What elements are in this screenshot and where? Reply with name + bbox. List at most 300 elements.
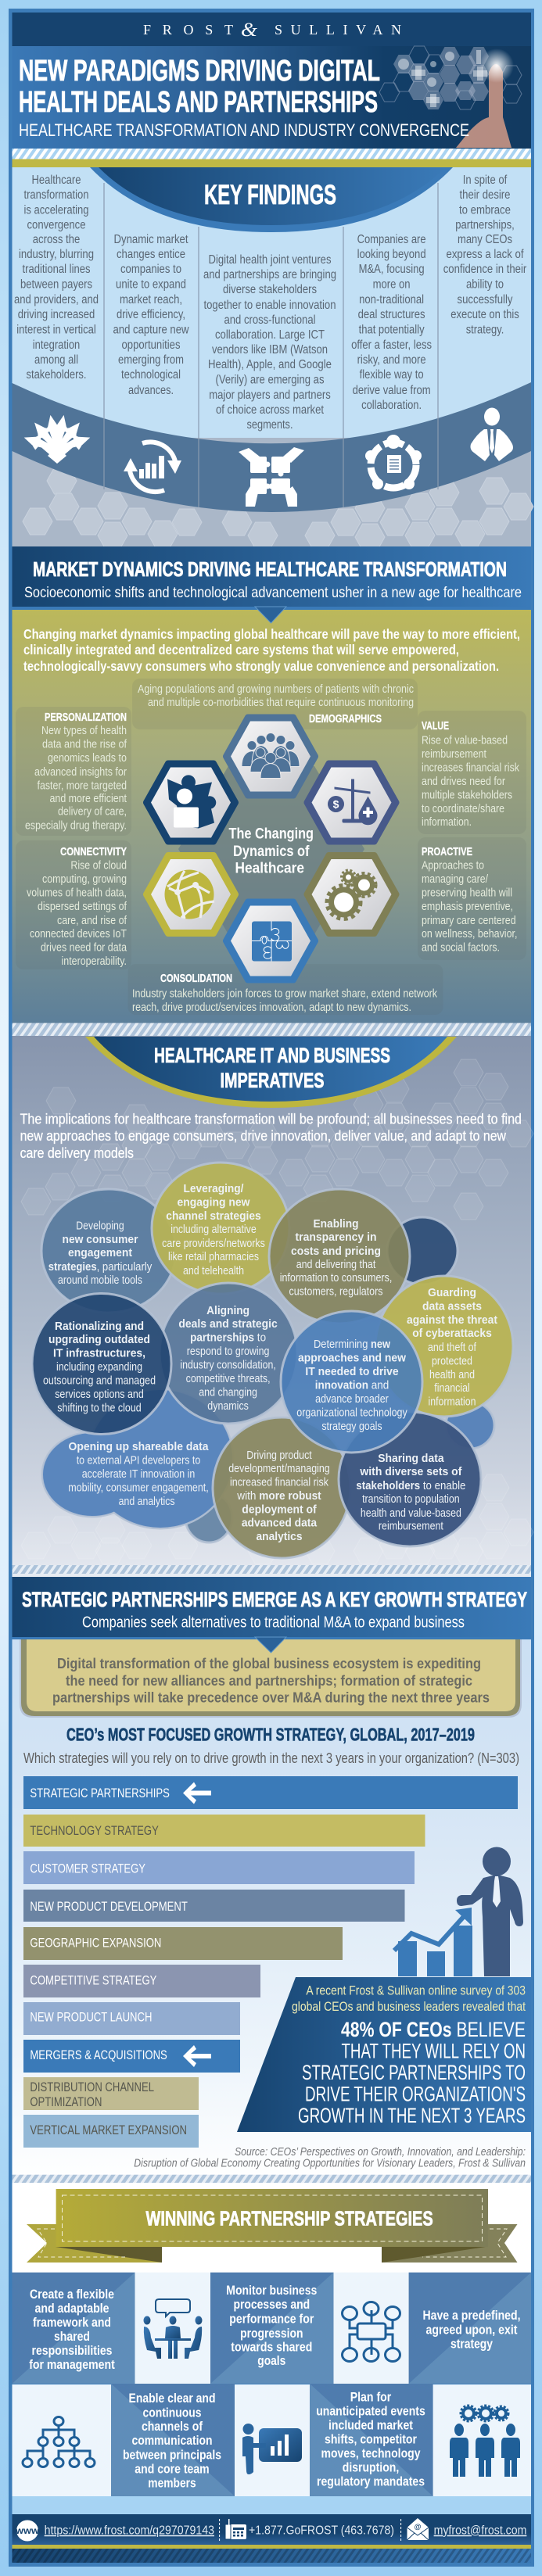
bubble: data assets: information: [429, 1395, 476, 1409]
text: finding 1: traditional lines: [22, 263, 91, 276]
box: proactive: managing care/: [422, 872, 489, 886]
strategy 2: performance for: [229, 2313, 314, 2327]
text: finding 1: [14, 174, 99, 382]
strategy 1: for management: [29, 2358, 115, 2372]
strategy 1: and adaptable: [34, 2302, 109, 2316]
box: demographics: DEMOGRAPHICS: [309, 712, 382, 726]
text: finding 1: is accelerating: [23, 203, 89, 217]
icon: businessman: [471, 408, 513, 461]
intro text: care delivery models: [20, 1145, 134, 1161]
footer: [13, 2514, 531, 2563]
callout: tan box: partnerships will take precedence over M&A during the next three years: [52, 1689, 490, 1706]
heading: strategic partnerships: Companies seek alternatives to traditional M&A to expand business: [82, 1614, 465, 1632]
icon: email envelope: @: [415, 2523, 422, 2531]
bubble: transparency: Enabling: [313, 1217, 358, 1231]
source note: [134, 2146, 526, 2170]
strategy 1: framework and: [33, 2316, 111, 2330]
bar: competitive strategy: [23, 1965, 260, 1997]
ribbon heading: WINNING PARTNERSHIP STRATEGIES: [145, 2207, 433, 2230]
bubble: data analytics: development/managing: [228, 1462, 330, 1475]
bubble: data analytics: advanced data: [242, 1517, 318, 1530]
text: finding 5: strategy.: [466, 324, 504, 337]
hexagon diagram: [146, 718, 396, 980]
bubble: new approaches and IT: advance broader: [315, 1392, 389, 1406]
title: [19, 55, 380, 119]
box: value: information.: [422, 815, 472, 829]
hexagon: proactive: [307, 855, 396, 933]
box: value: increases financial risk: [422, 761, 519, 775]
strategy 2: progression: [240, 2327, 303, 2341]
bar: technology strategy: [23, 1815, 425, 1847]
text: finding 2: technological: [121, 368, 181, 382]
strategy 3: Have a predefined,: [422, 2309, 521, 2323]
hexagon: consolidation: [226, 902, 315, 980]
bubble: consumer engagement: around mobile tools: [58, 1274, 142, 1287]
text: finding 3: and cross-functional: [224, 313, 316, 327]
text: finding 5: successfully: [457, 293, 513, 306]
center label: The Changing: [228, 826, 314, 843]
strategy 1: Create a flexible: [30, 2288, 114, 2302]
bubble: deals and partnerships: respond to growing: [187, 1345, 269, 1358]
bubble: new channel strategies: like retail pharmacies: [168, 1250, 259, 1263]
strategy 4: [111, 2384, 235, 2496]
box: consolidation: Industry stakeholders join forces to grow market share, extend network: [132, 987, 437, 1001]
text: finding 2: [113, 233, 189, 397]
bubble: new approaches and IT: Determining new: [314, 1338, 390, 1351]
bubble: sharing data: stakeholders to enable: [356, 1479, 465, 1492]
box: demographics: and multiple co-morbidities that require continuous monitoring: [148, 696, 414, 709]
bubble: new approaches and IT: IT needed to drive: [305, 1365, 399, 1378]
text: finding 5: confidence in their: [443, 263, 526, 276]
panel: market dynamics: [13, 607, 531, 1023]
box: connectivity: Rise of cloud: [70, 859, 127, 872]
box: value: [418, 711, 526, 834]
text: finding 4: collaboration.: [361, 399, 422, 412]
text: finding 4: non-traditional: [359, 293, 424, 306]
text: finding 1: integration: [33, 339, 80, 352]
bubble: new approaches and IT: approaches and new: [298, 1352, 406, 1365]
text: finding 1: Healthcare: [31, 174, 81, 187]
bar: distribution channel optimization: [23, 2077, 199, 2110]
panel: growth strategy survey: [13, 1637, 531, 2184]
callout: 48% of CEOs: 48% OF CEOs BELIEVE: [341, 2018, 526, 2041]
box: connectivity: connected devices IoT: [30, 927, 127, 940]
strategy 5: Plan for: [350, 2391, 392, 2405]
text: finding 1: driving increased: [18, 308, 95, 321]
title: HEALTH DEALS AND PARTNERSHIPS: [19, 86, 378, 119]
bubble: sharing data: health and value-based: [361, 1507, 461, 1520]
bubble: consumer engagement: Developing: [76, 1220, 124, 1233]
text: finding 1: interest in vertical: [16, 324, 96, 337]
bar: new product launch: [23, 2002, 240, 2035]
bubble: sharing data: with diverse sets of: [359, 1465, 462, 1478]
bubble: new approaches and IT: strategy goals: [321, 1420, 382, 1433]
bubble: shareable data: Opening up shareable data: [69, 1440, 209, 1453]
text: finding 4: [351, 233, 432, 412]
callout: tan box: Digital transformation of the global business ecosystem is expediting: [57, 1655, 481, 1671]
text: finding 2: unite to expand: [116, 278, 186, 292]
text: finding 4: deal structures: [358, 308, 425, 321]
bubble: shareable data: and analytics: [119, 1495, 175, 1508]
bubble: data assets: protected: [432, 1355, 472, 1368]
bubble: consumer engagement: engagement: [68, 1246, 132, 1259]
logo bar: SULLIVAN: [275, 22, 401, 38]
bubble: data analytics: deployment of: [242, 1503, 318, 1517]
text: finding 2: emerging from: [118, 353, 184, 367]
bubble: IT infrastructures: [43, 1320, 156, 1415]
strategy 5: moves, technology: [321, 2447, 421, 2461]
bubble: transparency: transparency in: [296, 1231, 377, 1244]
text: finding 1: between payers: [20, 278, 92, 292]
icon: meeting: [144, 2299, 202, 2359]
logo bar: [13, 13, 531, 46]
row 2 background: [13, 2384, 531, 2496]
bubble: deals and partnerships: competitive threats,: [186, 1372, 271, 1385]
text: finding 3: and partnerships are bringing: [203, 268, 336, 281]
heading arc: key findings: [90, 167, 453, 232]
text: finding 5: In spite of: [463, 174, 508, 187]
text: finding 3: [203, 253, 336, 432]
icon: growth cycle: [124, 442, 181, 492]
box: personalization: and more efficient: [50, 792, 127, 805]
text: finding 1: among all: [34, 353, 78, 367]
callout: tan box: the need for new alliances and partnerships; formation of strategic: [66, 1672, 472, 1689]
row 1 background: [13, 2273, 531, 2384]
strategy 2: goals: [257, 2354, 285, 2368]
strategy 4: between principals: [123, 2449, 221, 2463]
column dividers: [104, 183, 438, 507]
box: consolidation: reach, drive product/services innovation, adapt to new dynamics.: [132, 1001, 411, 1014]
text: finding 5: [443, 174, 526, 337]
text: finding 1: across the: [33, 233, 80, 246]
text: finding 3: Health), Apple, and Google: [208, 358, 332, 371]
text: finding 4: derive value from: [353, 384, 431, 397]
text: finding 5: execute on this: [450, 308, 519, 321]
bubble: new channel strategies: [162, 1182, 265, 1277]
bubble: data assets: and theft of: [428, 1341, 477, 1354]
intro text: [20, 1112, 522, 1161]
text: finding 5: to embrace: [459, 203, 511, 217]
text: finding 1: and providers, and: [14, 293, 99, 306]
strategy 1: [13, 2273, 135, 2384]
strategy 5: disruption,: [343, 2461, 399, 2475]
bubble: sharing data: [356, 1452, 465, 1533]
bubble: IT infrastructures: services options and: [55, 1388, 144, 1401]
text: finding 1: stakeholders.: [27, 368, 86, 382]
logo bar: FROST: [143, 22, 233, 38]
strategy 5: [310, 2384, 433, 2496]
strategy 4: and core team: [135, 2463, 210, 2477]
icon: email envelope: [407, 2518, 429, 2540]
bubble: sharing data: transition to population: [362, 1492, 460, 1506]
bubble: sharing data: reimbursement: [379, 1520, 444, 1533]
text: finding 5: ability to: [466, 278, 504, 292]
text: finding 1: transformation: [23, 188, 89, 202]
strategy 3: [409, 2273, 531, 2384]
text: finding 4: that potentially: [359, 324, 425, 337]
bubble: sharing data: Sharing data: [378, 1452, 444, 1465]
bubble: deals and partnerships: and changing: [199, 1386, 257, 1399]
bubble: deals and partnerships: Aligning: [206, 1304, 249, 1317]
text: finding 3: (Verily) are emerging as: [216, 374, 325, 387]
bubble: new channel strategies: care providers/networks: [162, 1237, 265, 1250]
box: demographics: [132, 679, 418, 729]
bubble: data analytics: analytics: [257, 1530, 302, 1543]
bubble: new approaches and IT: organizational technology: [296, 1406, 407, 1420]
text: finding 4: Companies are: [357, 233, 426, 246]
bubble: data assets: of cyberattacks: [412, 1327, 492, 1340]
bar chart: [23, 1776, 518, 2148]
box: value: multiple stakeholders: [422, 789, 512, 802]
bubble: new channel strategies: Leveraging/: [183, 1182, 244, 1195]
box: connectivity: computing, growing: [42, 872, 127, 886]
strategy 4: communication: [131, 2434, 213, 2448]
box: proactive: PROACTIVE: [422, 845, 472, 858]
bar: geographic expansion: [23, 1927, 343, 1960]
icon: businessman with growth chart: [394, 1847, 523, 1976]
hexagon: connectivity: [146, 855, 235, 933]
bar: competitive strategy: COMPETITIVE STRATEGY: [30, 1973, 156, 1988]
strategy 1: shared: [54, 2330, 90, 2344]
strategy 3: strategy: [450, 2338, 494, 2352]
website link: https://www.frost.com/q297079143: [45, 2524, 214, 2538]
center label: Healthcare: [235, 861, 304, 877]
text: finding 4: offer a faster, less: [351, 339, 432, 352]
icon: phone: [225, 2519, 246, 2539]
phone number: +1.877.GoFROST (463.7678): [249, 2524, 394, 2538]
box: personalization: PERSONALIZATION: [45, 711, 127, 724]
box: consolidation: [128, 964, 443, 1015]
center hexagon: [178, 766, 364, 934]
bar: new product development: NEW PRODUCT DEVELOPMENT: [30, 1899, 188, 1914]
text: finding 3: major players and partners: [209, 389, 331, 402]
callout: tan box: [20, 1637, 522, 1718]
bubble: deals and partnerships: dynamics: [207, 1399, 249, 1413]
banner: [13, 46, 531, 149]
bubble chart: [32, 1163, 513, 1558]
curved band: [13, 382, 531, 512]
bubble: data analytics: Driving product: [246, 1449, 312, 1462]
box: proactive: emphasis preventive,: [422, 900, 513, 913]
box: personalization: data and the rise of: [42, 738, 127, 751]
bar: new product development: [23, 1890, 405, 1922]
bubble: deals and partnerships: deals and strategic: [178, 1317, 278, 1331]
text: finding 3: segments.: [247, 418, 293, 432]
bubble: new approaches and IT: [296, 1338, 407, 1433]
bubble: data analytics: [228, 1449, 330, 1543]
bar: customer strategy: CUSTOMER STRATEGY: [30, 1861, 145, 1876]
text: finding 3: diverse stakeholders: [223, 283, 317, 296]
bubble: IT infrastructures: outsourcing and managed: [43, 1374, 156, 1388]
strategy 4: members: [148, 2477, 196, 2491]
callout: 48% of CEOs: [237, 1977, 531, 2132]
bubble: shareable data: accelerate IT innovation in: [82, 1467, 195, 1481]
heading arc: imperatives: [85, 1037, 457, 1108]
heading: strategic partnerships: [13, 1577, 531, 1637]
text: finding 2: Dynamic market: [114, 233, 188, 246]
bubble: deals and partnerships: partnerships to: [190, 1331, 266, 1345]
bar: mergers and acquisitions: MERGERS & ACQUISITIONS: [30, 2048, 167, 2062]
heading arc: key findings: KEY FINDINGS: [204, 180, 336, 210]
bubble: new channel strategies: including alternative: [170, 1223, 257, 1236]
bubble: new channel strategies: and telehealth: [183, 1264, 244, 1277]
arrow notch: [255, 607, 286, 623]
hexagon: demographics: [226, 718, 315, 796]
text: finding 2: companies to: [120, 263, 181, 276]
bubble: new channel strategies: engaging new: [177, 1196, 250, 1209]
bar: vertical market expansion: [23, 2115, 199, 2148]
heading arc: imperatives: IMPERATIVES: [221, 1069, 324, 1092]
heading: market dynamics: [13, 546, 531, 607]
intro text: clinically integrated and decentralized care systems that will serve empowered,: [23, 642, 459, 657]
bubble: consumer engagement: strategies, particularly: [48, 1260, 153, 1274]
text: finding 3: of choice across market: [216, 403, 325, 417]
icon: converging arrows: [21, 414, 93, 464]
strategy 1: responsibilities: [31, 2344, 113, 2358]
bubble: data assets: [407, 1286, 497, 1409]
hexagon: personalization: [146, 763, 235, 841]
bubble: data assets: Guarding: [428, 1286, 476, 1299]
box: proactive: primary care centered: [422, 914, 516, 927]
strategy 5: included market: [328, 2419, 413, 2433]
box: connectivity: drives need for data: [41, 941, 127, 955]
box: personalization: advanced insights for: [34, 765, 127, 779]
strategy 5: unanticipated events: [316, 2405, 425, 2419]
arrow: mergers and acquisitions: [183, 2045, 211, 2067]
text: finding 1: industry, blurring: [19, 248, 94, 261]
strategy 2: [210, 2273, 333, 2384]
bubble: deals and partnerships: industry consolidation,: [180, 1359, 276, 1372]
bubble: new channel strategies: channel strategies: [166, 1209, 261, 1223]
text: finding 3: collaboration. Large ICT: [215, 328, 325, 342]
panel: key findings: [13, 167, 533, 550]
bubble: data assets: health and: [429, 1368, 475, 1381]
bar: technology strategy: TECHNOLOGY STRATEGY: [30, 1823, 159, 1838]
intro text: [23, 626, 520, 674]
bubble: transparency: customers, regulators: [289, 1285, 383, 1299]
text: finding 5: their desire: [460, 188, 510, 202]
bubble: IT infrastructures: shifting to the cloud: [57, 1402, 142, 1415]
bubble: transparency: [280, 1217, 392, 1299]
strategy 5: shifts, competitor: [325, 2433, 417, 2447]
bubble: IT infrastructures: upgrading outdated: [48, 1333, 150, 1346]
hexagon pattern: [23, 468, 533, 550]
bubble: IT infrastructures: IT infrastructures,: [53, 1347, 145, 1360]
ribbon heading: [27, 2189, 518, 2263]
strategy 2: towards shared: [231, 2341, 312, 2355]
bar: distribution channel optimization: OPTIMIZATION: [30, 2094, 102, 2109]
bubble: data analytics: increased financial risk: [230, 1476, 328, 1489]
text: finding 4: more on: [373, 278, 411, 292]
title: NEW PARADIGMS DRIVING DIGITAL: [19, 55, 380, 88]
bubble: deals and partnerships: [178, 1304, 278, 1413]
text: finding 2: opportunities: [122, 339, 181, 352]
bubble: transparency: information to consumers,: [280, 1271, 392, 1284]
panel: healthcare IT and business imperatives: [13, 1036, 533, 1565]
icon: www: [15, 2520, 40, 2541]
box: consolidation: CONSOLIDATION: [160, 972, 232, 985]
strategy 3: agreed upon, exit: [425, 2323, 518, 2338]
text: finding 4: flexible way to: [360, 368, 424, 382]
bar: new product launch: NEW PRODUCT LAUNCH: [30, 2010, 152, 2025]
text: finding 4: looking beyond: [357, 248, 426, 261]
bar: strategic partnerships: [23, 1776, 518, 1809]
hexagon: value: $: [333, 797, 339, 810]
strategy 2: processes and: [233, 2298, 310, 2312]
box: personalization: especially drug therapy.: [25, 819, 127, 833]
heading arc: imperatives: HEALTHCARE IT AND BUSINESS: [154, 1044, 390, 1067]
text: finding 5: partnerships,: [455, 219, 515, 231]
text: finding 2: market reach,: [120, 293, 182, 306]
bubble backgrounds: [32, 1163, 513, 1558]
bar: customer strategy: [23, 1851, 415, 1884]
text: finding 3: together to enable innovation: [203, 299, 336, 312]
box: personalization: [16, 707, 131, 836]
box: proactive: Approaches to: [422, 859, 484, 872]
text: finding 1: convergence: [27, 219, 86, 231]
strategy 4: channels of: [142, 2420, 203, 2434]
box: connectivity: care, and rise of: [57, 914, 127, 927]
text: finding 2: and capture new: [113, 324, 189, 337]
bubble: IT infrastructures: including expanding: [56, 1360, 142, 1374]
strategy 5: regulatory mandates: [317, 2475, 425, 2489]
strategy 4: Enable clear and: [128, 2391, 216, 2406]
box: proactive: and social factors.: [422, 941, 500, 955]
bubble: IT infrastructures: Rationalizing and: [55, 1320, 144, 1333]
icon: process network: [343, 2302, 400, 2361]
box: demographics: Aging populations and growing numbers of patients with chronic: [138, 683, 414, 696]
email link: myfrost@frost.com: [434, 2524, 526, 2538]
bubble: shareable data: [68, 1440, 209, 1508]
box: connectivity: [16, 840, 131, 969]
box: connectivity: volumes of health data,: [27, 887, 127, 900]
logo bar: &: [241, 20, 258, 41]
text: finding 3: vendors like IBM (Watson: [212, 343, 328, 356]
text: finding 2: changes entice: [117, 248, 185, 261]
icon: medical hexagons and finger: [379, 46, 522, 148]
bar: mergers and acquisitions: [23, 2040, 240, 2073]
bar: strategic partnerships: STRATEGIC PARTNERSHIPS: [30, 1786, 170, 1800]
box: proactive: on wellness, behavior,: [422, 927, 517, 940]
bubble: data assets: data assets: [422, 1300, 482, 1313]
bubble: data analytics: with more robust: [236, 1489, 321, 1503]
bubble: transparency: costs and pricing: [291, 1245, 381, 1258]
box: connectivity: dispersed settings of: [38, 900, 127, 913]
bubble: shareable data: to external API developers to: [77, 1453, 200, 1467]
bar: geographic expansion: GEOGRAPHIC EXPANSION: [30, 1936, 161, 1951]
box: connectivity: CONNECTIVITY: [60, 845, 127, 858]
box: value: reimbursement: [422, 747, 487, 761]
bubble: data assets: against the threat: [407, 1313, 497, 1327]
box: personalization: genomics leads to: [48, 751, 127, 765]
text: finding 3: Digital health joint ventures: [208, 253, 332, 267]
box: personalization: delivery of care,: [58, 805, 127, 819]
icon: hierarchy: [23, 2417, 95, 2467]
bar: distribution channel optimization: DISTRIBUTION CHANNEL: [30, 2080, 154, 2094]
text: finding 5: express a lack of: [446, 248, 524, 261]
strategy 4: continuous: [142, 2406, 202, 2420]
strategy 2: Monitor business: [226, 2284, 317, 2298]
box: value: and drives need for: [422, 775, 505, 788]
bubble: data assets: financial: [434, 1381, 470, 1395]
icon: team and gears: [450, 2406, 520, 2477]
box: personalization: faster, more targeted: [38, 779, 127, 793]
bubble: transparency: and delivering that: [296, 1258, 376, 1271]
box: value: to coordinate/share: [422, 802, 504, 815]
bubble: consumer engagement: [48, 1220, 153, 1287]
text: finding 4: risky, and more: [357, 353, 426, 367]
text: finding 2: drive efficiency,: [117, 308, 185, 321]
